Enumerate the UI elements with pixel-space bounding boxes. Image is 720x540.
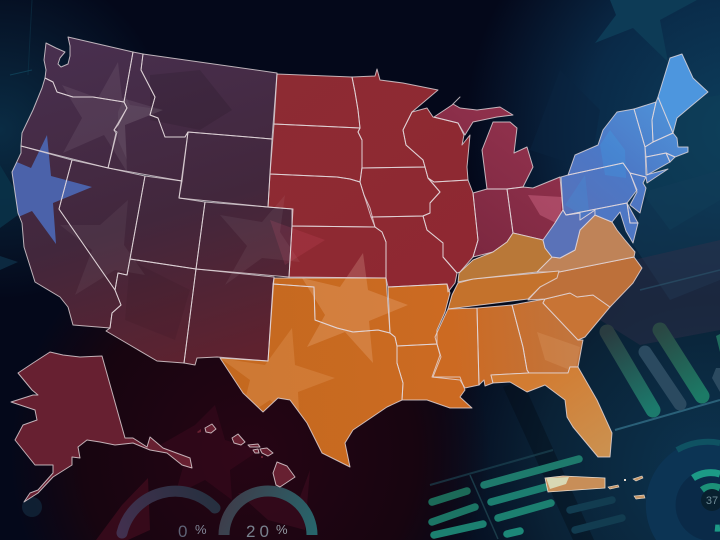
Texas <box>220 284 403 467</box>
map: midwest states <box>268 69 478 292</box>
New Jersey <box>630 173 646 213</box>
Delaware <box>627 203 638 223</box>
Vermont <box>634 102 656 147</box>
South Carolina <box>543 293 610 340</box>
Tennessee <box>448 271 559 309</box>
Georgia <box>512 299 583 373</box>
California <box>12 146 121 328</box>
Alabama <box>477 305 529 386</box>
star: Oklahoma <box>302 253 408 363</box>
donut gauge with number: 37 <box>706 495 718 507</box>
star: Kentucky <box>505 235 530 280</box>
Colorado <box>196 202 293 277</box>
Arizona <box>106 259 196 363</box>
star: California <box>12 135 92 244</box>
vertical bar chart <box>607 330 720 410</box>
star: Pennsylvania <box>566 188 588 212</box>
Wisconsin <box>403 108 470 182</box>
star: Georgia <box>537 332 580 372</box>
Wyoming <box>179 132 272 207</box>
Virginia <box>537 215 635 272</box>
dot <box>22 497 42 517</box>
dark shape: Arizona <box>125 260 190 340</box>
map: southern states <box>220 215 642 467</box>
Massachusetts <box>645 133 688 157</box>
star: Colorado <box>220 195 300 285</box>
Connecticut <box>646 153 670 175</box>
Michigan lower peninsula <box>482 122 533 189</box>
Washington <box>44 37 133 102</box>
map: western states <box>12 37 293 365</box>
Kentucky <box>458 233 552 282</box>
New York <box>568 109 668 183</box>
Minnesota <box>352 69 438 168</box>
map: Alaska and Hawaii <box>11 352 295 502</box>
Oregon <box>21 78 127 168</box>
Michigan upper peninsula <box>434 97 513 135</box>
Illinois <box>423 178 478 273</box>
star: Nebraska kansas <box>270 220 325 265</box>
Idaho <box>108 52 188 181</box>
map: great lakes states <box>434 97 563 257</box>
South Dakota <box>270 124 362 182</box>
Mississippi <box>432 308 479 388</box>
donut gauge: 20 percent <box>224 491 312 540</box>
Maine <box>658 54 708 133</box>
dark shape: Tennessee <box>480 308 488 310</box>
star: Oregon <box>62 62 163 172</box>
star: New York <box>600 130 626 178</box>
Maryland <box>566 203 638 243</box>
map: northeastern states <box>543 54 708 258</box>
Missouri <box>371 216 457 292</box>
Indiana <box>473 189 513 257</box>
star: Idaho <box>118 95 163 160</box>
Iowa <box>360 167 440 217</box>
star overlays on the map <box>0 62 640 430</box>
star: Ohio <box>528 195 562 225</box>
Kansas <box>289 226 386 278</box>
star: Virginia <box>590 215 640 290</box>
Ohio <box>507 177 563 240</box>
North Dakota <box>274 74 360 128</box>
star: Texas <box>221 328 334 411</box>
Nebraska <box>268 174 375 227</box>
West Virginia <box>543 210 595 258</box>
donut gauge: 0 percent <box>122 491 215 540</box>
North Carolina <box>528 257 642 307</box>
dark shape: Montana <box>150 106 162 114</box>
Pennsylvania <box>561 163 637 215</box>
Alaska <box>11 352 192 502</box>
donut gauge: 0 percent: % <box>195 522 207 537</box>
horizontal bar chart <box>432 459 622 535</box>
Hawaii <box>197 424 295 487</box>
New Hampshire <box>652 97 673 142</box>
New Mexico <box>184 269 274 365</box>
Oklahoma <box>273 278 390 333</box>
Utah <box>130 176 205 269</box>
map: Florida <box>491 367 612 457</box>
Rhode Island <box>666 153 675 162</box>
donut gauge: 20 percent: % <box>276 522 288 537</box>
map: Puerto Rico and islands <box>545 476 645 499</box>
Montana <box>141 54 277 139</box>
star: Nevada <box>60 200 145 295</box>
Nevada <box>59 160 145 290</box>
donut gauge with number <box>646 439 720 540</box>
Arkansas <box>388 284 450 346</box>
Louisiana <box>397 344 472 408</box>
